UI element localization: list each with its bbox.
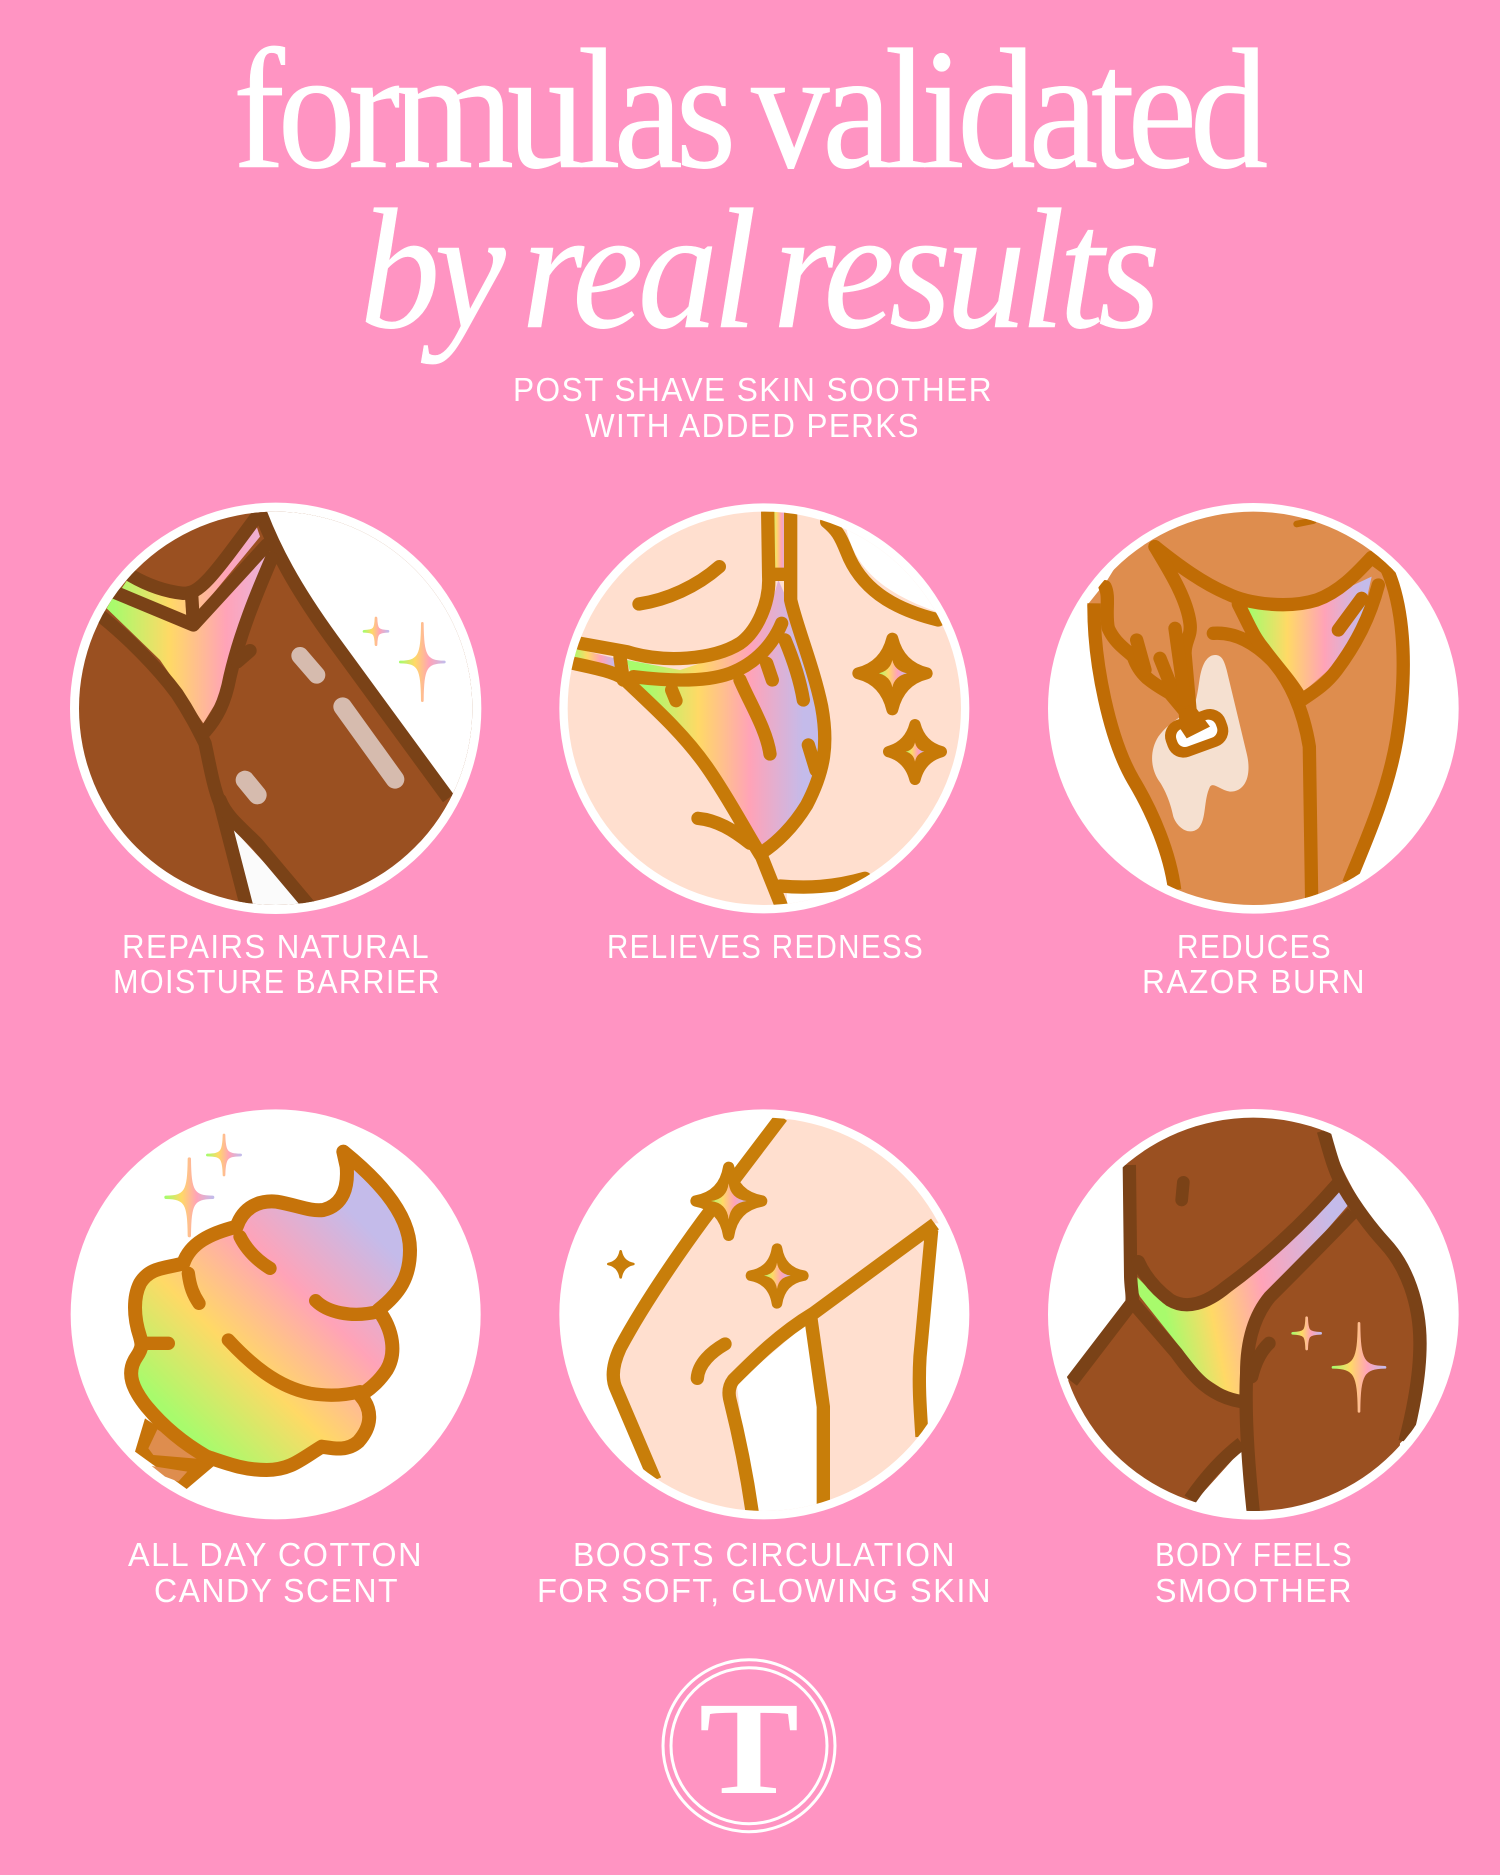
label: body feels smoother xyxy=(1155,1536,1353,1609)
label: repairs natural moisture barrier xyxy=(113,928,441,1000)
label: all day cotton candy scent xyxy=(128,1536,423,1609)
panel: relieves redness xyxy=(559,503,970,914)
title: validated xyxy=(751,15,1266,205)
label: reduces razor burn xyxy=(1142,928,1366,1000)
title: formulas xyxy=(233,15,731,205)
subtitle xyxy=(513,371,993,444)
title xyxy=(233,15,1266,365)
logo: T xyxy=(699,1674,799,1822)
label: body feels smoother: BODY FEELS xyxy=(1155,1536,1353,1573)
label: boosts circulation xyxy=(537,1536,992,1609)
label: reduces razor burn: RAZOR BURN xyxy=(1142,963,1366,1000)
title: by real results xyxy=(360,175,1156,365)
panel: boosts circulation xyxy=(559,1109,973,1557)
label: relieves redness: RELIEVES REDNESS xyxy=(607,928,924,965)
subtitle: WITH ADDED PERKS xyxy=(585,407,920,444)
logo xyxy=(663,1660,835,1832)
label: all day cotton candy scent: ALL DAY COTTON xyxy=(128,1536,423,1573)
label: repairs natural moisture barrier: MOISTURE BARRIER xyxy=(113,963,441,1000)
panel: reduces razor burn xyxy=(1048,500,1459,914)
label: repairs natural moisture barrier: REPAIRS NATURAL xyxy=(122,928,430,965)
label: boosts circulation: BOOSTS CIRCULATION xyxy=(573,1536,956,1573)
label: boosts circulation: FOR SOFT, GLOWING SKIN xyxy=(537,1572,992,1609)
subtitle: POST SHAVE SKIN SOOTHER xyxy=(513,371,993,408)
label: all day cotton candy scent: CANDY SCENT xyxy=(154,1572,399,1609)
panel: repairs natural moisture barrier xyxy=(70,502,482,914)
panel: body feels smoother xyxy=(1048,1109,1459,1523)
label: body feels smoother: SMOOTHER xyxy=(1155,1572,1353,1609)
label: reduces razor burn: REDUCES xyxy=(1177,928,1332,965)
panel: all day cotton candy scent xyxy=(71,1109,481,1519)
